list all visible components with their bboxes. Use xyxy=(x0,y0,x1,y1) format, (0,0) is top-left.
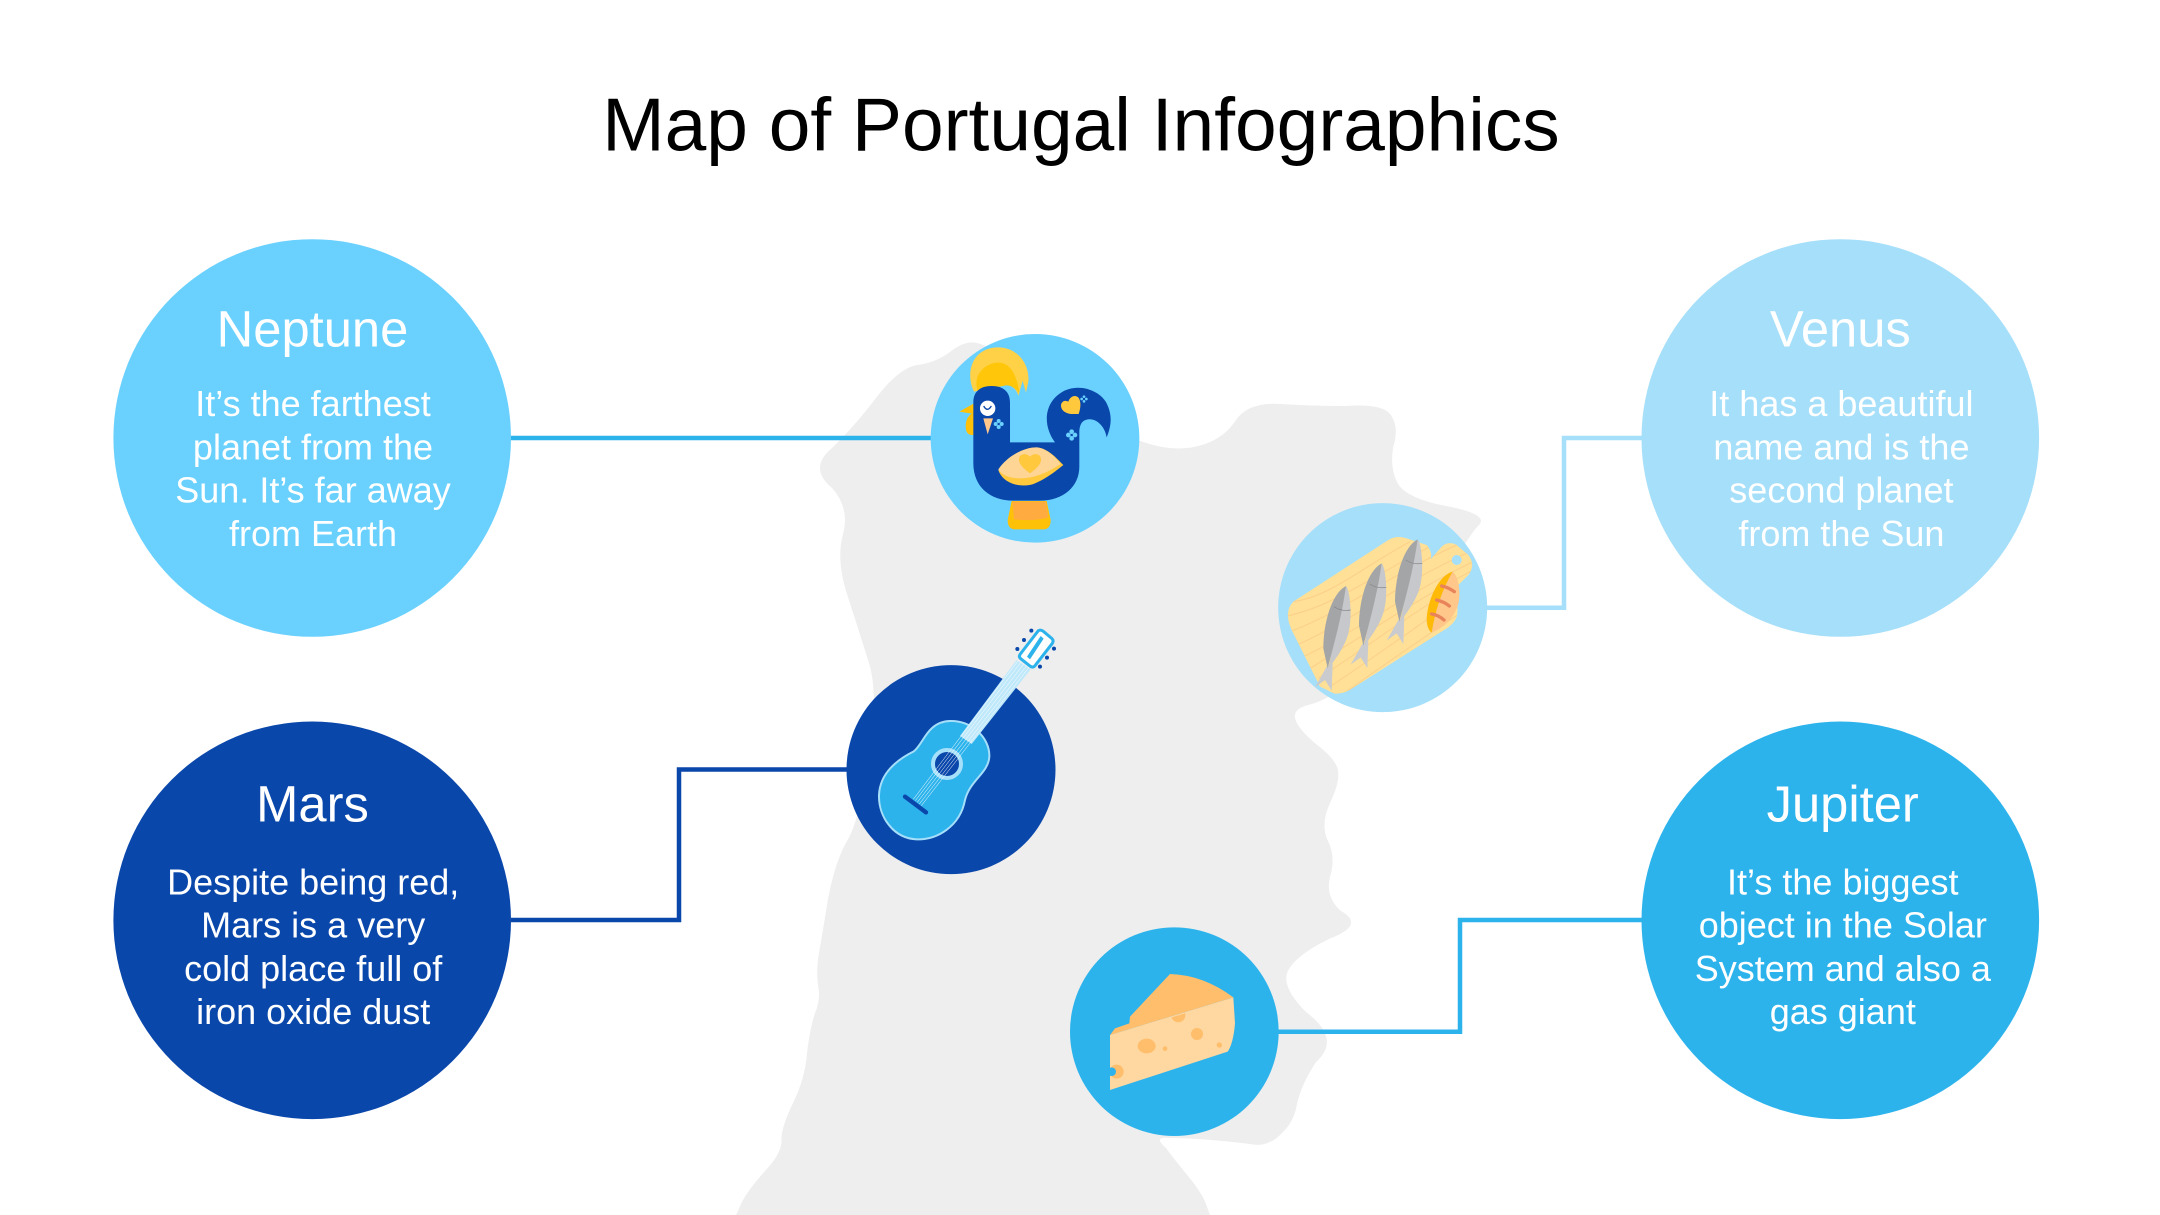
text: Venus description: name and is the xyxy=(1713,426,1969,467)
title: Map of Portugal Infographics xyxy=(602,83,1560,167)
text: Mars description: Despite being red, xyxy=(167,861,459,902)
text: Neptune description: Sun. It’s far away xyxy=(175,470,451,511)
text: Venus description: from the Sun xyxy=(1738,513,1944,554)
panel: Venus xyxy=(1642,239,2039,637)
icon: rooster xyxy=(931,334,1139,543)
heading: Mars: Mars xyxy=(256,776,369,833)
connector: Venus to sardines xyxy=(1486,438,1642,608)
text: Mars description: cold place full of xyxy=(184,948,443,989)
text: Venus description: second planet xyxy=(1729,470,1953,511)
text: Mars description: Mars is a very xyxy=(201,905,425,946)
connector: Neptune to rooster xyxy=(511,436,931,440)
map of Portugal xyxy=(736,342,1481,1215)
text: Jupiter description: object in the Solar xyxy=(1699,905,1987,946)
panel: Jupiter xyxy=(1642,722,2039,1119)
text: Jupiter description: It’s the biggest xyxy=(1727,861,1959,902)
text: Neptune description: planet from the xyxy=(193,426,433,467)
text: Jupiter description: System and also a xyxy=(1695,948,1992,989)
heading: Jupiter: Jupiter xyxy=(1767,776,1919,833)
panel: Mars xyxy=(113,722,511,1119)
text: Neptune description: from Earth xyxy=(229,513,397,554)
icon: guitar xyxy=(846,629,1056,874)
text: Jupiter description: gas giant xyxy=(1770,991,1916,1032)
heading: Venus: Venus xyxy=(1770,301,1911,358)
icon: sardines on board xyxy=(1278,503,1487,712)
panel: Neptune xyxy=(113,239,511,637)
connector: Jupiter to cheese xyxy=(1278,920,1642,1032)
text: Mars description: iron oxide dust xyxy=(196,991,430,1032)
text: Neptune description: It’s the farthest xyxy=(195,383,431,424)
icon: cheese wedge xyxy=(1070,927,1279,1136)
connector: Mars to guitar xyxy=(511,770,847,920)
heading: Neptune: Neptune xyxy=(217,301,408,358)
text: Venus description: It has a beautiful xyxy=(1709,383,1973,424)
